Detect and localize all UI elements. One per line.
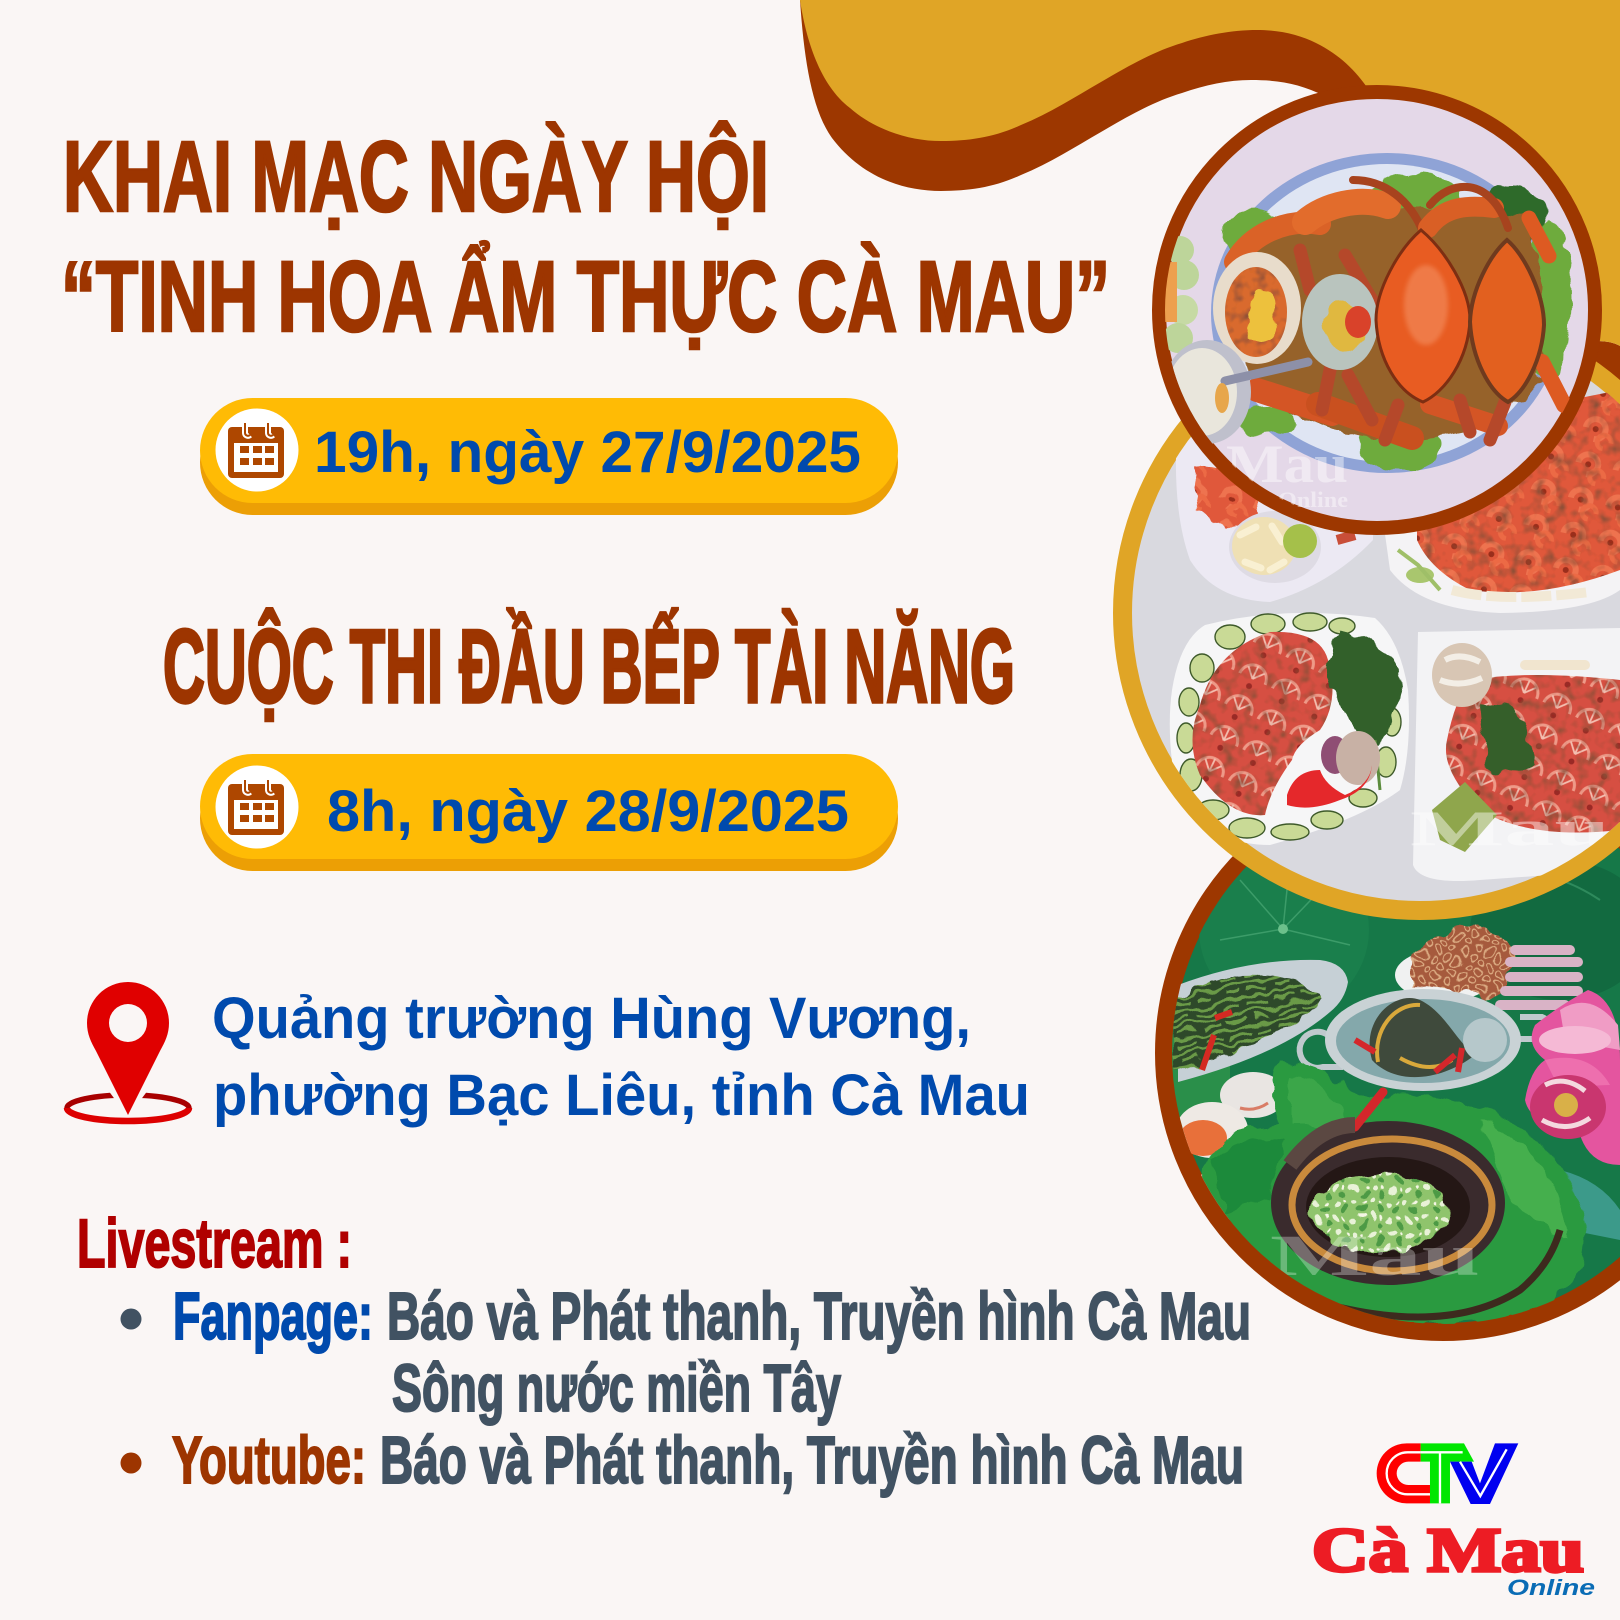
blue plate bbox=[1211, 153, 1563, 473]
youtube label: Youtube: bbox=[172, 1423, 366, 1498]
bottom right plate with prawns bbox=[1413, 628, 1620, 881]
photo circle: crab platter bbox=[1159, 92, 1595, 528]
title: Khai mạc ngày hội: KHAI MẠC NGÀY HỘI bbox=[63, 121, 769, 233]
livestream heading: Livestream : bbox=[77, 1205, 352, 1282]
Cà Mau wordmark: Cà Mau bbox=[1312, 1517, 1584, 1585]
eel coil bbox=[1271, 1092, 1505, 1285]
decorative wave: brown band and gold corner bbox=[800, 0, 1620, 400]
fanpage names: Sông nước miền Tây bbox=[392, 1351, 841, 1426]
lotus leaf wrap bbox=[1204, 1060, 1585, 1324]
sauce bowls bbox=[1180, 1072, 1276, 1220]
fried onions and lotus stems bbox=[1395, 925, 1578, 1005]
title: Khai mạc ngày hội bbox=[61, 121, 1110, 353]
bullet: fanpage bbox=[120, 1308, 142, 1330]
photo circle: shrimp plates bbox=[1122, 316, 1620, 910]
top left plate with garlic bowl bbox=[1176, 430, 1373, 602]
icon: calendar bbox=[216, 766, 298, 848]
logo: CTV Cà Mau Online bbox=[1312, 1443, 1595, 1600]
watermark: Mau bbox=[1226, 434, 1348, 494]
lettuce bbox=[1219, 172, 1572, 469]
cucumber garnish bbox=[1163, 236, 1199, 353]
fanpage label: Fanpage: bbox=[173, 1279, 373, 1354]
crab body mass bbox=[1240, 205, 1543, 440]
venue text bbox=[212, 986, 1030, 1128]
whole crab small bbox=[1470, 240, 1544, 402]
title: Khai mạc ngày hội: “TINH HOA ẨM THỰC CÀ MAU” bbox=[61, 240, 1110, 353]
square plate with prawns bbox=[1170, 613, 1409, 845]
icon: calendar bbox=[216, 408, 298, 492]
top right plate with shrimp bbox=[1383, 390, 1620, 613]
watermark: Mau bbox=[1410, 800, 1610, 856]
photo circle: eel and lotus dishes bbox=[1155, 846, 1620, 1341]
youtube names: Báo và Phát thanh, Truyền hình Cà Mau bbox=[380, 1423, 1244, 1498]
venue text: phường Bạc Liêu, tỉnh Cà Mau bbox=[213, 1063, 1030, 1128]
whole crab large bbox=[1376, 230, 1470, 402]
opened crab shell left bbox=[1213, 252, 1301, 364]
fanpage names bbox=[387, 1279, 1251, 1426]
date text: 8h, ngày 28/9/2025 bbox=[327, 779, 849, 844]
hot pot bbox=[1300, 989, 1549, 1091]
basket rim bbox=[1330, 1230, 1560, 1317]
icon: location pin bbox=[67, 982, 189, 1121]
lotus leaves background bbox=[1160, 845, 1620, 1240]
opened crab shell right bbox=[1302, 274, 1378, 370]
Online wordmark: Online bbox=[1507, 1575, 1595, 1600]
soup bowl and spoon bbox=[1163, 340, 1308, 444]
watermark bbox=[1227, 446, 1348, 507]
livestream block bbox=[77, 1205, 1251, 1498]
bullet: youtube bbox=[120, 1452, 142, 1474]
watermark: Mau bbox=[1270, 1223, 1480, 1288]
crab claws and legs bbox=[1235, 180, 1564, 440]
watermark: Online bbox=[1278, 487, 1348, 512]
CTV mark bbox=[1377, 1443, 1518, 1504]
vegetable plate bbox=[1172, 960, 1348, 1082]
fanpage names: Báo và Phát thanh, Truyền hình Cà Mau bbox=[387, 1279, 1251, 1354]
venue text: Quảng trường Hùng Vương, bbox=[212, 986, 971, 1051]
lotus flowers bbox=[1525, 990, 1620, 1165]
date pill: opening ceremony bbox=[200, 398, 898, 515]
date text: 19h, ngày 27/9/2025 bbox=[314, 420, 861, 485]
date pill: chef contest bbox=[200, 754, 898, 871]
